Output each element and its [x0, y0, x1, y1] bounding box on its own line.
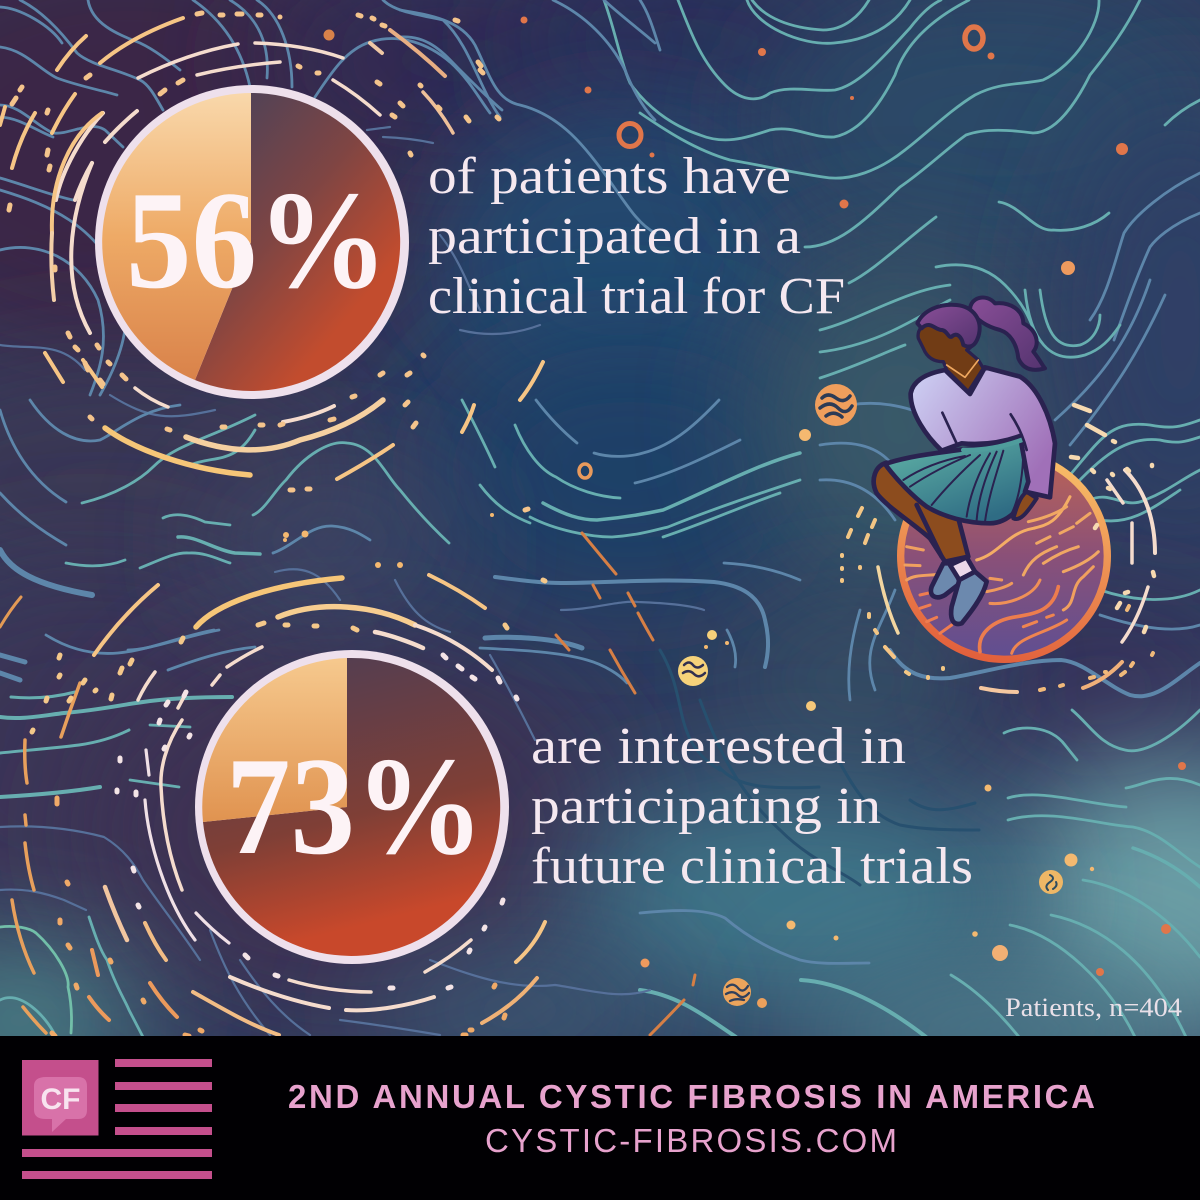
source note: Patients, n=404: [1005, 993, 1182, 1022]
footer url: CYSTIC-FIBROSIS.COM: [485, 1122, 897, 1159]
text block: interested: [531, 718, 973, 895]
flowing wave lines, lower right: [640, 650, 1200, 1037]
sweater: [911, 367, 1055, 497]
flowing wave lines, left and centre: [0, 0, 800, 1037]
hand: [1013, 492, 1037, 519]
ripple marks around 56% chart: [0, 13, 543, 510]
swirl planet small 2: [678, 656, 708, 686]
sweater creases: [942, 413, 1027, 450]
text block: interested: are interested in: [531, 718, 906, 775]
necklace: [947, 360, 978, 377]
hair: [917, 305, 980, 347]
ponytail: [970, 298, 1045, 370]
text block: participated: participated in a: [428, 208, 801, 265]
logo: flag with CF speech bubble: CF: [40, 1083, 80, 1116]
planet: [901, 453, 1107, 659]
text block: interested: participating in: [531, 778, 881, 835]
ripple marks around 73% chart: [0, 533, 695, 1036]
text block: participated: of patients have: [428, 148, 791, 205]
text block: participated: [428, 148, 845, 325]
flowing teal and blue wave lines, upper right: [400, 0, 1200, 700]
footer title: 2ND ANNUAL CYSTIC FIBROSIS IN AMERICA: [288, 1078, 1095, 1115]
ripple marks around seated planet: [842, 405, 1155, 692]
logo: flag with CF speech bubble: [22, 1059, 212, 1179]
waistband: [963, 440, 1022, 450]
text block: interested: future clinical trials: [531, 838, 973, 895]
footer band: [0, 1036, 1200, 1200]
swirl planet small 4: [723, 978, 751, 1006]
stat: 56%: 56%: [126, 163, 388, 318]
floating dots and rings: [283, 16, 1186, 1008]
skirt: [885, 438, 1030, 523]
pie chart 73 percent: [195, 650, 509, 964]
text block: participated: clinical trial for CF: [428, 268, 845, 325]
illustration: girl sitting on planet: [874, 298, 1107, 659]
neck and head: [918, 322, 983, 392]
swirl planet small 1: [815, 384, 857, 426]
pie chart 56 percent: [95, 85, 409, 399]
swirl planet small 3: [1039, 870, 1063, 894]
legs and feet: [874, 463, 987, 624]
stat: 73%: 73%: [226, 729, 484, 884]
